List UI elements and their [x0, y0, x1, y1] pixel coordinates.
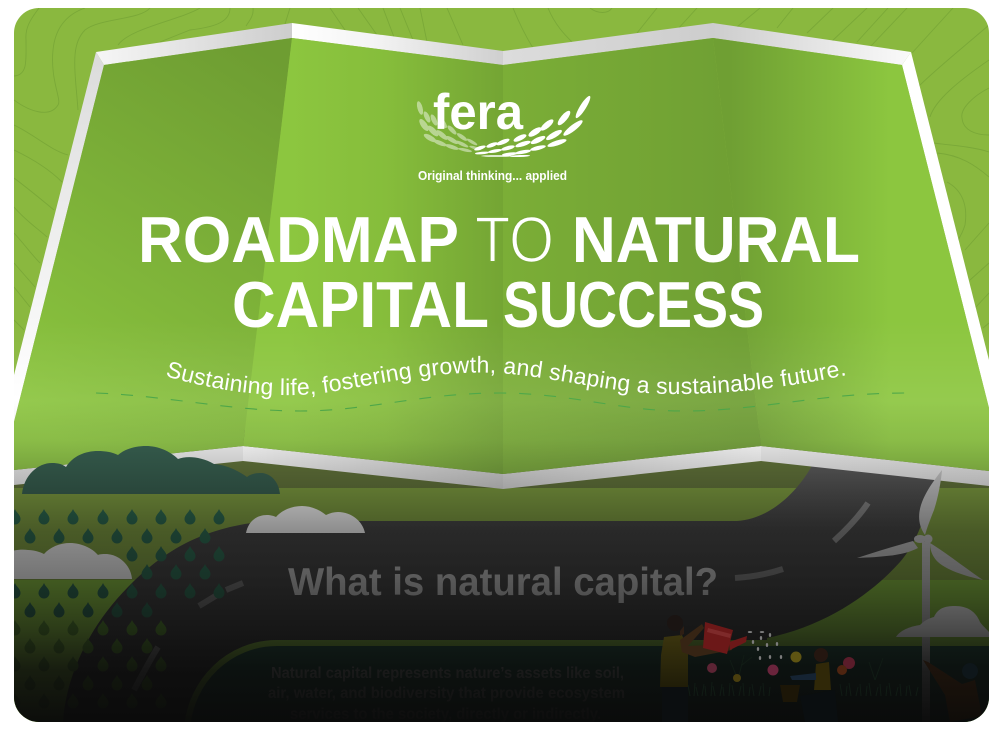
heading: what is natural capital: What is natural capital? — [288, 561, 718, 604]
text block: natural capital definition: services to the society, directly or indirectly. — [290, 706, 601, 723]
logo tagline: Original thinking... applied — [418, 169, 567, 183]
text block: natural capital definition: air, water, and biodiversity that provide ecosystem — [268, 685, 625, 702]
icon: cloud right — [896, 606, 992, 637]
icon: dark green bush — [22, 446, 280, 494]
title — [142, 216, 858, 328]
icon: cloud left — [8, 543, 132, 579]
text block: natural capital definition — [269, 666, 624, 696]
title: ROADMAP — [138, 203, 459, 276]
icon: wind turbine — [858, 470, 983, 702]
logo leaves — [474, 94, 592, 157]
subtitle: Sustaining life, fostering growth, and shaping a sustainable future. — [167, 356, 845, 400]
dashed route line — [96, 393, 905, 411]
folded map — [14, 23, 989, 489]
person with watering can — [660, 616, 782, 687]
title: SUCCESS — [503, 268, 764, 341]
kneeling person — [790, 648, 831, 690]
text block: natural capital definition: Natural capital represents nature’s assets like soil, — [271, 665, 624, 682]
road lane markings — [144, 502, 870, 666]
logo: fera — [417, 92, 590, 182]
map paper frame — [14, 23, 989, 489]
icon: cloud centre — [246, 506, 365, 533]
topographic contour lines — [14, 8, 989, 330]
person on right — [923, 660, 982, 722]
bottom fade overlay — [14, 400, 989, 729]
illustration: garden with people — [660, 615, 982, 722]
map folds — [14, 38, 989, 474]
road — [68, 466, 934, 696]
flowers and grass — [688, 652, 918, 702]
logo wordmark: fera — [433, 84, 524, 140]
title: CAPITAL — [232, 268, 489, 341]
field of tree dots — [10, 509, 224, 708]
landscape fields — [14, 430, 989, 729]
title: TO — [475, 203, 554, 276]
title: NATURAL — [572, 203, 860, 276]
panel: what is natural capital background — [187, 643, 1000, 729]
